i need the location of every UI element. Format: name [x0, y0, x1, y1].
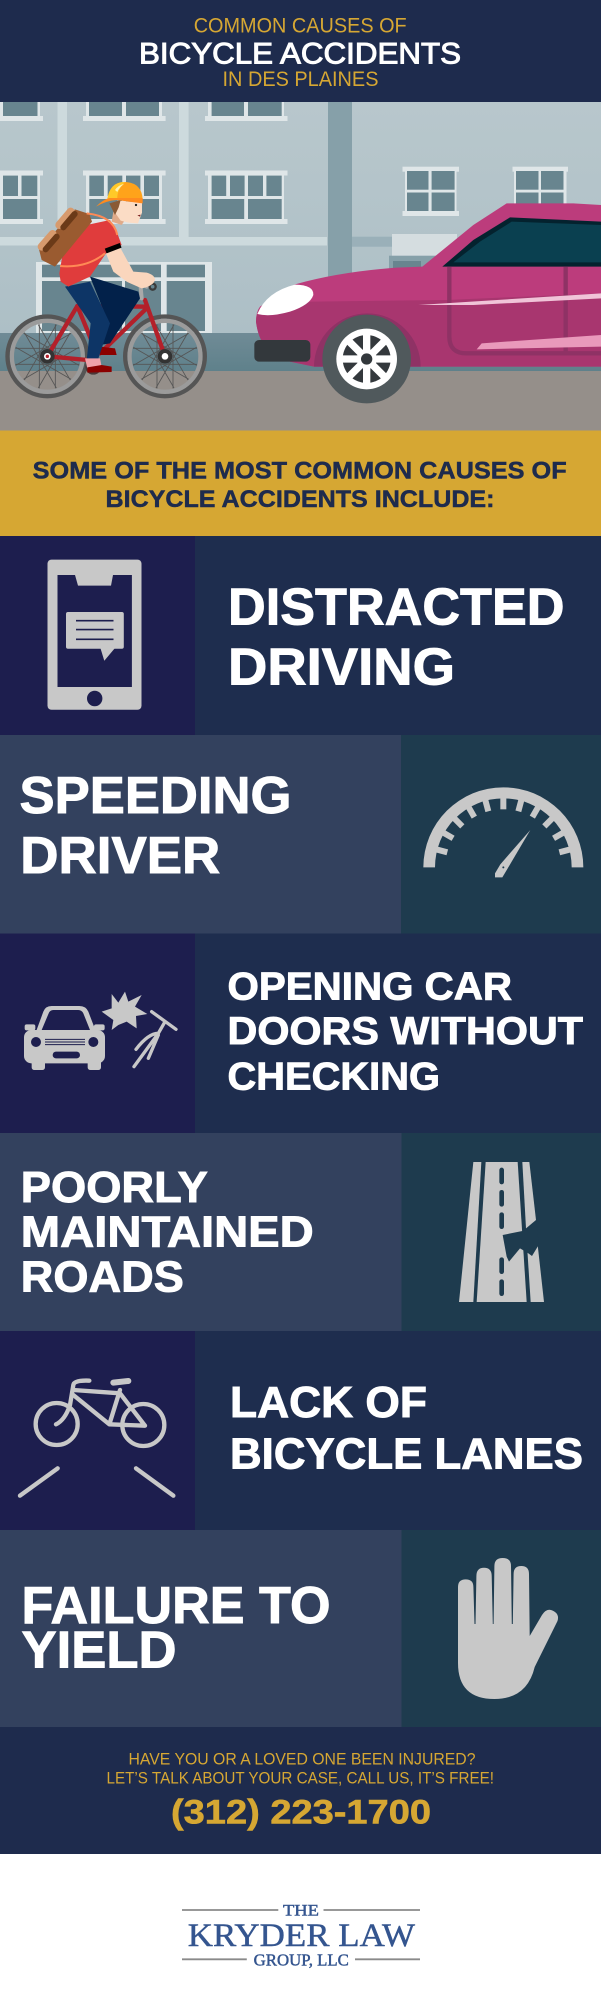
- building facade details: [0, 102, 568, 333]
- torso shirt: [59, 220, 122, 287]
- label: opening car doors without checking: CHECKING: [228, 1056, 440, 1098]
- label: speeding driver: [20, 766, 292, 884]
- gold subheading band: [0, 430, 601, 536]
- icon: bicycle between lane lines: [20, 1381, 173, 1496]
- icon: raised hand: [458, 1558, 558, 1699]
- logo: the kryder law group: THE: [283, 1903, 319, 1920]
- panel: poorly maintained roads: [0, 1133, 601, 1331]
- door seams: [449, 267, 601, 353]
- lower body shade: [256, 293, 601, 367]
- helmet: [96, 182, 143, 207]
- label: lack of bicycle lanes: BICYCLE LANES: [230, 1430, 583, 1478]
- bike frame: [47, 284, 165, 360]
- label: opening car doors without checking: [228, 966, 583, 1098]
- arm: [106, 246, 155, 288]
- panel: opening car doors: [0, 934, 601, 1133]
- title line: bicycle accidents: BICYCLE ACCIDENTS: [139, 38, 461, 71]
- header banner: [0, 0, 601, 102]
- icon: speedometer: [423, 787, 583, 877]
- icon: damaged road: [459, 1162, 544, 1302]
- back leg: [90, 277, 140, 345]
- headlight: [257, 285, 313, 315]
- road: [0, 371, 601, 430]
- label: poorly maintained roads: POORLY: [21, 1164, 208, 1212]
- cyclist: [7, 182, 205, 396]
- label: speeding driver: SPEEDING: [20, 766, 292, 824]
- label: distracted driving: DRIVING: [228, 638, 455, 696]
- label: speeding driver: DRIVER: [20, 826, 220, 884]
- subheading line 1: SOME OF THE MOST COMMON CAUSES OF: [33, 458, 567, 485]
- body highlights: [418, 293, 601, 305]
- label: lack of bicycle lanes: [230, 1379, 583, 1478]
- logo: the kryder law group: GROUP, LLC: [254, 1950, 349, 1969]
- call to action text: [106, 1749, 494, 1787]
- label: failure to yield: YIELD: [22, 1621, 176, 1679]
- panel: lack of bicycle lanes: [0, 1331, 601, 1530]
- title line: common causes of: COMMON CAUSES OF: [194, 14, 407, 37]
- label: poorly maintained roads: MAINTAINED: [21, 1209, 314, 1257]
- wheel: [322, 315, 411, 403]
- phone number: (312) 223-1700: [171, 1793, 431, 1831]
- call to action text: HAVE YOU OR A LOVED ONE BEEN INJURED?: [128, 1749, 476, 1768]
- logo: the kryder law group: KRYDER LAW: [188, 1918, 416, 1954]
- sidewalk: [0, 333, 601, 371]
- label: distracted driving: [228, 578, 564, 696]
- panel: speeding driver: [0, 735, 601, 934]
- impact burst: [102, 992, 147, 1030]
- icon: car door collision: [24, 992, 176, 1070]
- label: opening car doors without checking: DOORS WITHOUT: [228, 1010, 583, 1053]
- car body: [256, 203, 601, 367]
- backpack straps: [60, 213, 117, 266]
- label: lack of bicycle lanes: LACK OF: [230, 1379, 427, 1427]
- subheading line 2: BICYCLE ACCIDENTS INCLUDE:: [106, 486, 494, 513]
- neck and head: [109, 200, 142, 225]
- upper windows: [0, 102, 288, 121]
- logo: the kryder law group: [182, 1903, 420, 1969]
- bicycle handlebar and fork: [134, 1012, 176, 1067]
- front leg: [65, 282, 110, 362]
- label: opening car doors without checking: OPENING CAR: [228, 966, 512, 1009]
- title line: in des plaines: IN DES PLAINES: [222, 68, 378, 91]
- label: failure to yield: [22, 1576, 330, 1679]
- wheel arch: [314, 313, 421, 367]
- street scene illustration: [0, 102, 601, 430]
- car front: [24, 1006, 105, 1070]
- middle windows: [0, 170, 288, 224]
- rear wheel: [7, 316, 87, 396]
- car: [254, 203, 601, 403]
- windshield: [442, 217, 601, 267]
- backpack: [39, 209, 92, 267]
- label: poorly maintained roads: ROADS: [21, 1254, 184, 1302]
- label: poorly maintained roads: [21, 1164, 314, 1302]
- bumper: [254, 340, 310, 362]
- label: failure to yield: FAILURE TO: [22, 1576, 330, 1634]
- icon: smartphone with message: [48, 560, 142, 710]
- label: distracted driving: DISTRACTED: [228, 578, 564, 636]
- call to action panel: [0, 1727, 601, 1854]
- hubs: [40, 349, 172, 364]
- right building windows: [402, 167, 568, 216]
- front wheel: [125, 316, 205, 396]
- panel: failure to yield: [0, 1530, 601, 1727]
- lower window: [36, 262, 212, 333]
- panel: distracted driving: [0, 536, 601, 735]
- call to action text: LET’S TALK ABOUT YOUR CASE, CALL US, IT’S FREE!: [106, 1768, 494, 1787]
